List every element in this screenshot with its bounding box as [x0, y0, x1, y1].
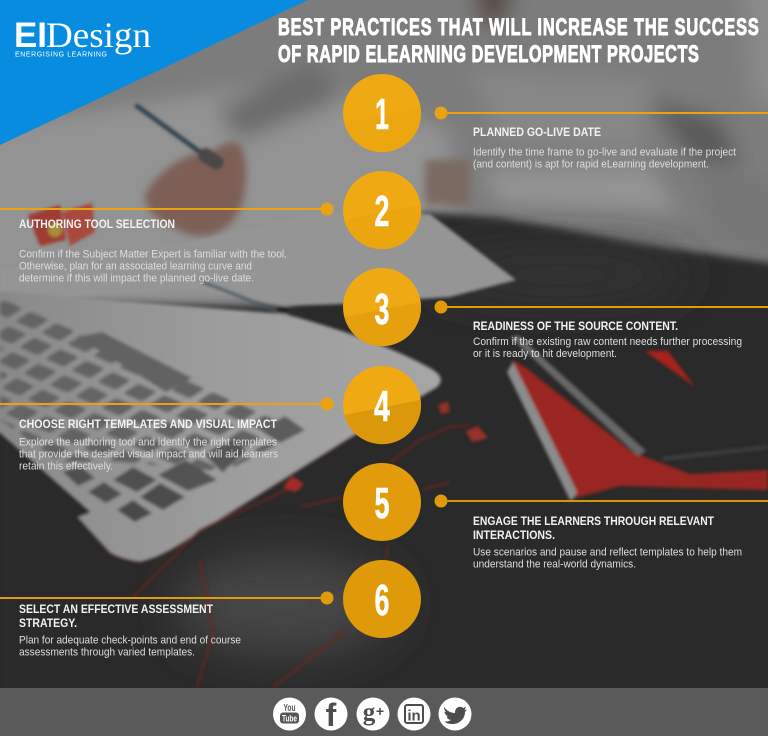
step 3 badge: 3 — [374, 285, 390, 334]
step 2 connector — [0, 202, 334, 216]
paper — [0, 212, 516, 306]
red objects — [28, 205, 66, 246]
icon: google plus: g — [363, 699, 376, 726]
pen — [137, 106, 215, 163]
step 3 text: readiness of source content — [473, 321, 742, 360]
step 6 badge: 6 — [374, 576, 390, 625]
step 4 text: templates and visual impact: that provide the desired visual impact and will aid learners — [19, 448, 278, 460]
step 1 text: planned go-live date — [473, 127, 736, 170]
step 1 badge — [343, 74, 421, 152]
footer bar — [0, 688, 768, 736]
icon: youtube: You — [284, 703, 296, 714]
blue corner banner — [0, 0, 308, 145]
step 1 connector — [434, 106, 768, 120]
step 2 text: authoring tool selection: Otherwise, plan for an associated learning curve and — [19, 260, 252, 272]
step 2 badge: 2 — [374, 187, 390, 236]
step 4 text: templates and visual impact: CHOOSE RIGHT TEMPLATES AND VISUAL IMPACT — [19, 419, 277, 431]
step 1 badge: 1 — [375, 90, 389, 139]
logo: Design — [46, 15, 151, 55]
step 1 text: planned go-live date: (and content) is apt for rapid eLearning development. — [473, 158, 709, 170]
hand — [145, 142, 246, 236]
step 6 text: assessment strategy: Plan for adequate check-points and end of course — [19, 634, 241, 646]
title: OF RAPID ELEARNING DEVELOPMENT PROJECTS — [278, 41, 699, 68]
step 3 connector — [434, 300, 768, 314]
icon: facebook: f — [326, 697, 337, 733]
keyboard — [0, 300, 277, 472]
step 4 connector — [0, 398, 334, 410]
step 3 text: readiness of source content: READINESS OF THE SOURCE CONTENT. — [473, 321, 678, 333]
step 4 badge: 4 — [374, 382, 390, 431]
icon: linkedin: in — [407, 708, 421, 724]
step 2 text: authoring tool selection: determine if this will impact the planned go-live date. — [19, 272, 254, 284]
icon: twitter — [438, 698, 472, 730]
logo: ENERGISING LEARNING — [15, 52, 107, 58]
step 4 badge — [343, 366, 421, 444]
step 4 text: templates and visual impact: retain this effectively. — [19, 460, 113, 472]
step 5 text: engage the learners: ENGAGE THE LEARNERS THROUGH RELEVANT — [473, 516, 714, 528]
icon: youtube — [273, 698, 306, 730]
step 3 badge — [343, 268, 421, 346]
step 5 badge: 5 — [374, 479, 390, 528]
step 5 connector — [434, 494, 768, 508]
step 6 text: assessment strategy: assessments through varied templates. — [19, 646, 195, 658]
laptop — [0, 290, 441, 562]
step 1 text: planned go-live date: Identify the time frame to go-live and evaluate if the project — [473, 146, 736, 158]
step 2 text: authoring tool selection: Confirm if the Subject Matter Expert is familiar with the tool. — [19, 248, 287, 260]
step 6 connector — [0, 592, 334, 604]
icon: linkedin — [398, 698, 430, 730]
step 6 text: assessment strategy: SELECT AN EFFECTIVE ASSESSMENT — [19, 604, 213, 616]
step 6 badge — [343, 560, 421, 638]
step 2 text: authoring tool selection — [19, 219, 287, 284]
desk — [0, 212, 768, 700]
step 5 text: engage the learners: understand the real-world dynamics. — [473, 558, 636, 570]
icon: google plus — [356, 698, 390, 730]
step 6 text: assessment strategy — [19, 604, 241, 658]
logo: EI — [14, 16, 47, 55]
step 5 text: engage the learners: Use scenarios and pause and reflect templates to help them — [473, 546, 742, 558]
step 1 text: planned go-live date: PLANNED GO-LIVE DATE — [473, 127, 601, 139]
step 4 text: templates and visual impact — [19, 419, 278, 472]
red cables — [133, 425, 470, 687]
step 5 badge — [343, 463, 421, 541]
icon: google plus: + — [376, 703, 384, 719]
step 2 text: authoring tool selection: AUTHORING TOOL SELECTION — [19, 219, 175, 231]
step 3 text: readiness of source content: Confirm if the existing raw content needs further processing — [473, 336, 742, 348]
icon: youtube: Tube — [282, 714, 297, 724]
title — [278, 14, 759, 68]
icon: facebook — [314, 697, 348, 733]
step 5 text: engage the learners: INTERACTIONS. — [473, 530, 555, 542]
step 6 text: assessment strategy: STRATEGY. — [19, 618, 77, 630]
logo — [14, 15, 151, 58]
red notebook — [512, 360, 768, 498]
step 4 text: templates and visual impact: Explore the authoring tool and identify the right templates — [19, 436, 277, 448]
step 5 text: engage the learners — [473, 516, 742, 570]
step 2 badge — [343, 171, 421, 249]
title: BEST PRACTICES THAT WILL INCREASE THE SUCCESS — [278, 14, 759, 41]
step 3 text: readiness of source content: or it is ready to hit development. — [473, 348, 617, 360]
